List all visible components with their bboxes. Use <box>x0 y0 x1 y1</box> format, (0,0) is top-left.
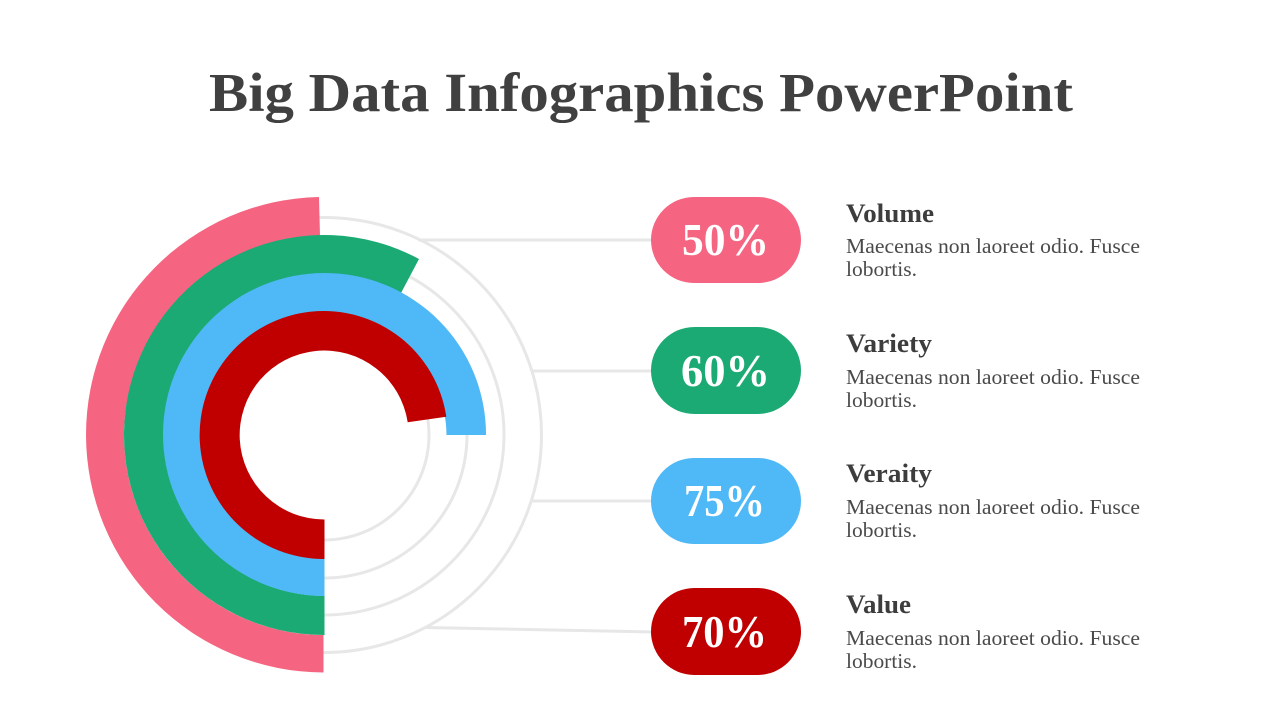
badge: 50% <box>651 197 801 283</box>
badge: 70%: 70% <box>682 607 767 657</box>
text: veraity description: lobortis. <box>846 518 917 542</box>
text: variety description: Maecenas non laoreet odio. Fusce <box>846 365 1140 389</box>
text: value description: lobortis. <box>846 649 917 673</box>
item: veraity <box>651 458 1145 544</box>
heading: volume: Volume <box>846 199 934 228</box>
text: volume description: Maecenas non laoreet odio. Fusce <box>846 234 1140 258</box>
text: variety description: lobortis. <box>846 388 917 412</box>
arc: volume <box>86 197 324 672</box>
badge: 75% <box>651 458 801 544</box>
item: volume <box>651 197 1145 283</box>
arc: verity <box>163 273 486 596</box>
text: volume description: lobortis. <box>846 257 917 281</box>
heading: value: Value <box>846 590 911 619</box>
heading: variety: Variety <box>846 329 932 358</box>
badge: 50%: 50% <box>682 215 769 265</box>
badge: 70% <box>651 588 801 675</box>
text: value description: Maecenas non laoreet odio. Fusce <box>846 626 1140 650</box>
connector lines and guide rings <box>106 218 655 652</box>
badge: 60% <box>651 327 801 414</box>
badge: 60%: 60% <box>681 346 770 396</box>
text: veraity description: Maecenas non laoreet odio. Fusce <box>846 495 1140 519</box>
item: value <box>651 588 1145 675</box>
item: variety <box>651 327 1145 414</box>
arc: variety <box>124 235 419 635</box>
radial progress chart <box>86 197 486 672</box>
badge: 75%: 75% <box>684 476 765 526</box>
heading: veraity: Veraity <box>846 459 932 488</box>
title: Big Data Infographics PowerPoint <box>209 62 1074 123</box>
arc: value <box>200 311 446 559</box>
